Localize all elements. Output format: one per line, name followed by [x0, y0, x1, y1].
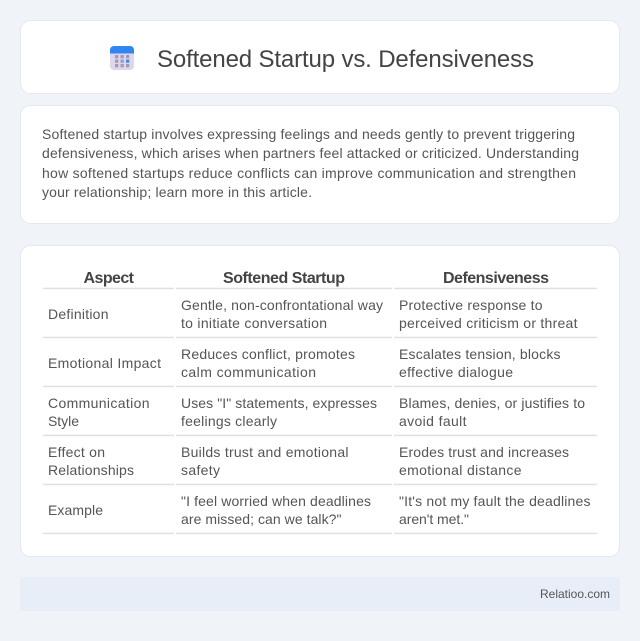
row: example — [48, 493, 590, 527]
row: effect on relationships: Builds trust and emotional — [181, 444, 348, 460]
row: communication style: feelings clearly — [181, 413, 277, 429]
comparison table — [43, 270, 597, 534]
row: definition: perceived criticism or threat — [399, 315, 578, 331]
row: example: "It's not my fault the deadlines — [399, 493, 590, 509]
row: communication style: avoid fault — [399, 413, 467, 429]
intro text: your relationship; learn more in this article. — [42, 184, 312, 200]
row: definition: to initiate conversation — [181, 315, 327, 331]
row: definition: Gentle, non-confrontational way — [181, 297, 383, 313]
row: effect on relationships: emotional distance — [399, 462, 522, 478]
intro text: Softened startup involves expressing feelings and needs gently to prevent triggering — [42, 126, 575, 142]
row: effect on relationships: safety — [181, 462, 220, 478]
row: example: are missed; can we talk?" — [181, 511, 342, 527]
intro text: how softened startups reduce conflicts can improve communication and strengthen — [42, 165, 576, 181]
row: emotional impact: Emotional Impact — [48, 355, 161, 371]
footer bar — [20, 577, 620, 611]
row: emotional impact — [48, 346, 560, 380]
row: emotional impact: Reduces conflict, promotes — [181, 346, 355, 362]
row: definition: Protective response to — [399, 297, 543, 313]
row: effect on relationships: Erodes trust and increases — [399, 444, 569, 460]
title: Softened Startup vs. Defensiveness — [157, 46, 534, 73]
row: emotional impact: effective dialogue — [399, 364, 513, 380]
table header: Softened Startup — [223, 270, 345, 287]
row: emotional impact: Escalates tension, blocks — [399, 346, 560, 362]
row: communication style: Blames, denies, or justifies to — [399, 395, 585, 411]
icon: calendar — [110, 46, 134, 70]
row: example: "I feel worried when deadlines — [181, 493, 371, 509]
row: communication style: Communication — [48, 395, 150, 411]
intro text — [42, 126, 579, 200]
table header — [84, 270, 549, 287]
row: definition — [48, 297, 578, 331]
row: definition: Definition — [48, 306, 108, 322]
intro panel — [20, 106, 620, 224]
table header: Defensiveness — [443, 270, 549, 287]
intro text: defensiveness, which arises when partners feel attacked or criticized. Understanding — [42, 145, 579, 161]
row: example: Example — [48, 502, 103, 518]
row: effect on relationships: Effect on — [48, 444, 105, 460]
row: communication style: Style — [48, 413, 79, 429]
row: communication style — [48, 395, 585, 429]
footer text: Relatioo.com — [540, 587, 610, 601]
row: communication style: Uses "I" statements, expresses — [181, 395, 377, 411]
table header: Aspect — [84, 270, 135, 287]
header panel — [20, 20, 620, 94]
row: effect on relationships: Relationships — [48, 462, 134, 478]
table panel — [20, 246, 620, 556]
row: example: aren't met." — [399, 511, 469, 527]
row: emotional impact: calm communication — [181, 364, 316, 380]
row: effect on relationships — [48, 444, 569, 478]
